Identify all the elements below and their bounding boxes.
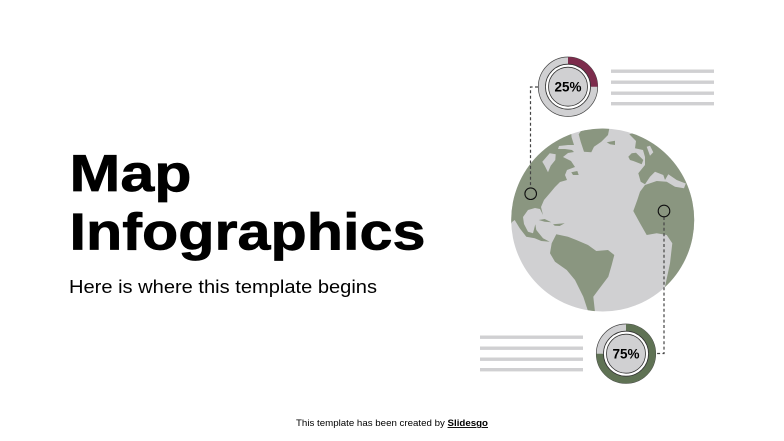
footer credit: This template has been created by Slidesgo [296, 418, 488, 428]
connector line: 75% to africa [656, 217, 664, 354]
globe map [511, 128, 694, 312]
subtitle: Here is where this template begins [69, 276, 377, 297]
donut: 25% [538, 57, 598, 116]
text placeholder lines: top [611, 70, 714, 105]
connector line: 25% to north america [530, 87, 538, 188]
greenland [578, 128, 610, 152]
donut: 75%: 75% [612, 346, 640, 362]
hudson bay [542, 153, 556, 172]
iceland [607, 141, 615, 145]
title: Map [70, 145, 192, 203]
newfoundland [571, 171, 579, 175]
british isles [628, 153, 643, 164]
europe and asia [630, 134, 686, 184]
donut: 25%: 25% [554, 79, 582, 95]
north america [511, 134, 575, 242]
text placeholder lines: bottom [480, 336, 583, 371]
title: Infographics [70, 204, 426, 262]
baltic sea [647, 146, 653, 156]
south america [550, 234, 614, 312]
caribbean islands [539, 219, 565, 226]
marker: africa [658, 205, 670, 217]
title [70, 145, 426, 262]
donut: 75% [596, 324, 656, 383]
africa [633, 181, 694, 287]
marker: north america [525, 188, 536, 200]
